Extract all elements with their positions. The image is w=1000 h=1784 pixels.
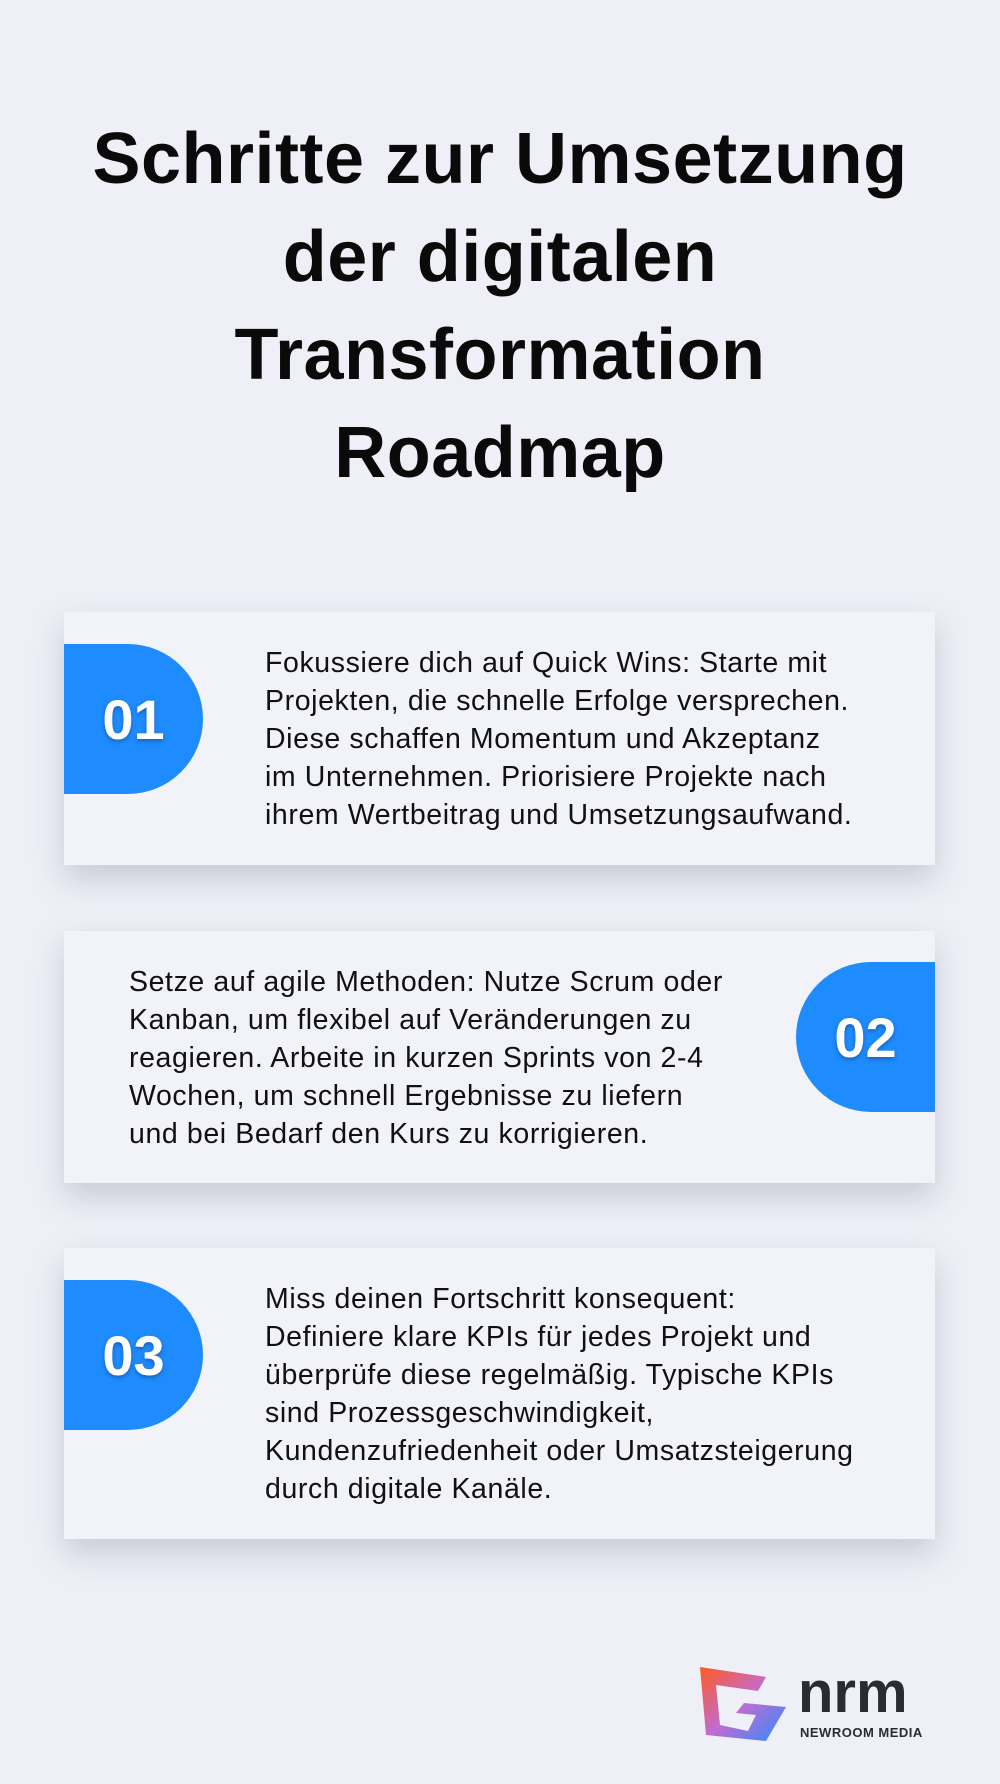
title: Schritte zur Umsetzung [92, 119, 908, 199]
logo: NEWROOM MEDIA [800, 1725, 923, 1740]
text step 1: im Unternehmen. Priorisiere Projekte nach [265, 761, 827, 793]
text step 3 [265, 1283, 854, 1505]
badge 02: 02 [834, 1006, 897, 1068]
title: Roadmap [334, 413, 666, 493]
text step 2 [129, 966, 723, 1150]
text step 3: überprüfe diese regelmäßig. Typische KPIs [265, 1359, 834, 1391]
icon: logo mark [700, 1667, 786, 1741]
panel: step 1 [64, 612, 935, 865]
text step 3: Definiere klare KPIs für jedes Projekt und [265, 1321, 811, 1353]
text step 1: Fokussiere dich auf Quick Wins: Starte mit [265, 647, 827, 679]
text step 3: sind Prozessgeschwindigkeit, [265, 1397, 654, 1429]
text step 1: ihrem Wertbeitrag und Umsetzungsaufwand. [265, 799, 852, 831]
title: der digitalen [283, 217, 717, 297]
panel: step 3 [64, 1248, 935, 1539]
logo text: nrm [798, 1660, 908, 1725]
panel: step 2 [64, 931, 935, 1183]
text step 1 [265, 647, 852, 831]
text step 2: und bei Bedarf den Kurs zu korrigieren. [129, 1118, 648, 1150]
title [92, 119, 908, 493]
text step 2: Setze auf agile Methoden: Nutze Scrum oder [129, 966, 723, 998]
title: Transformation [234, 315, 766, 395]
text step 3: durch digitale Kanäle. [265, 1473, 552, 1505]
logo [700, 1660, 923, 1741]
text step 2: reagieren. Arbeite in kurzen Sprints von 2-4 [129, 1042, 704, 1074]
text step 1: Projekten, die schnelle Erfolge versprechen. [265, 685, 849, 717]
badge 03: 03 [102, 1324, 165, 1386]
badge 03 [64, 1280, 203, 1430]
text step 1: Diese schaffen Momentum und Akzeptanz [265, 723, 821, 755]
text step 2: Kanban, um flexibel auf Veränderungen zu [129, 1004, 692, 1036]
text step 3: Miss deinen Fortschritt konsequent: [265, 1283, 736, 1315]
badge 01: 01 [102, 688, 165, 750]
badge 01 [64, 644, 203, 794]
badge 02 [796, 962, 935, 1112]
text step 3: Kundenzufriedenheit oder Umsatzsteigerung [265, 1435, 854, 1467]
text step 2: Wochen, um schnell Ergebnisse zu liefern [129, 1080, 683, 1112]
